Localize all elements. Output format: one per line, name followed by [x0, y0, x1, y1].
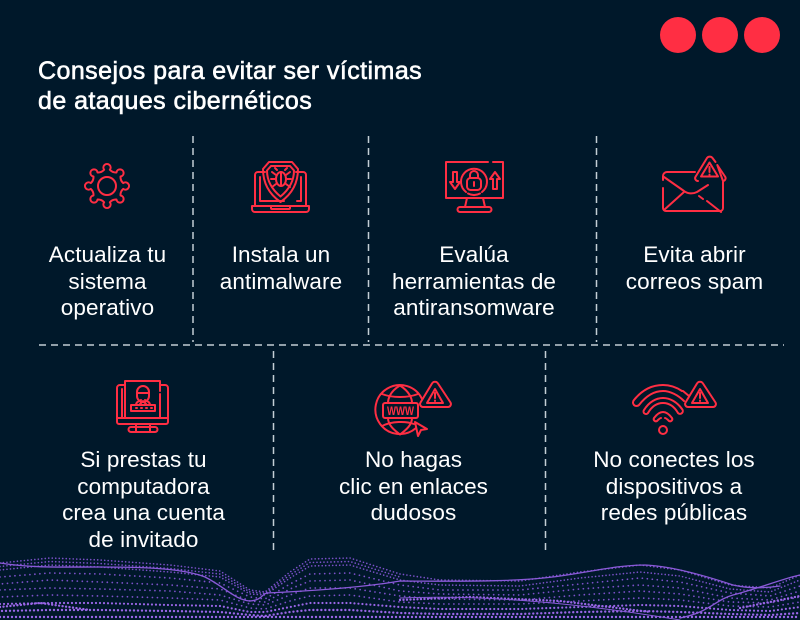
- text: Si prestas tu computadora crea una cuenta de invitado: crea una cuenta: [62, 500, 225, 525]
- text: No hagas clic en enlaces dudosos: [339, 447, 488, 525]
- icon: computer with guest user: [116, 380, 169, 433]
- icon: globe www with warning: WWW: [387, 404, 415, 418]
- text: Evalúa herramientas de antiransomware: [392, 242, 556, 320]
- text: Instala un antimalware: [220, 242, 342, 294]
- text: No hagas clic en enlaces dudosos: dudosos: [371, 500, 456, 525]
- icon: wifi with warning: [632, 380, 717, 435]
- text: Actualiza tu sistema operativo: operativo: [61, 295, 154, 320]
- title: Consejos para evitar ser víctimas: [38, 57, 422, 85]
- title: de ataques cibernéticos: [38, 87, 312, 115]
- icon: laptop with shield and bug: [251, 161, 310, 213]
- text: Evalúa herramientas de antiransomware: Evalúa: [439, 242, 509, 267]
- text: Actualiza tu sistema operativo: [48, 242, 166, 320]
- text: Actualiza tu sistema operativo: sistema: [68, 268, 147, 294]
- text: Si prestas tu computadora crea una cuenta de invitado: computadora: [77, 474, 210, 498]
- text: Instala un antimalware: Instala un: [232, 242, 330, 267]
- text: Evita abrir correos spam: [626, 242, 763, 294]
- text: Evalúa herramientas de antiransomware: herramientas de: [392, 268, 556, 294]
- text: No hagas clic en enlaces dudosos: No hagas: [365, 447, 462, 472]
- decorative red dots: [660, 17, 780, 53]
- text: Evita abrir correos spam: correos spam: [626, 268, 763, 294]
- text: No conectes los dispositivos a redes públicas: No conectes los: [593, 447, 755, 472]
- text: No conectes los dispositivos a redes públicas: [593, 447, 755, 525]
- text: Si prestas tu computadora crea una cuenta de invitado: de invitado: [89, 526, 198, 552]
- text: No hagas clic en enlaces dudosos: clic en enlaces: [339, 474, 488, 498]
- text: Si prestas tu computadora crea una cuenta de invitado: Si prestas tu: [80, 447, 207, 472]
- text: Actualiza tu sistema operativo: Actualiza tu: [49, 242, 166, 267]
- icon: monitor with padlock and arrows: [445, 161, 504, 213]
- icon: envelope with warning: [662, 156, 727, 213]
- text: No conectes los dispositivos a redes públicas: dispositivos a: [606, 474, 742, 498]
- wave highlight lines: [0, 563, 800, 620]
- text: No conectes los dispositivos a redes públicas: redes públicas: [601, 500, 747, 525]
- text: Evalúa herramientas de antiransomware: antiransomware: [393, 295, 555, 320]
- text: Evita abrir correos spam: Evita abrir: [643, 242, 746, 267]
- icon: globe www with warning: [374, 380, 452, 437]
- title: [38, 57, 422, 115]
- text: Instala un antimalware: antimalware: [220, 268, 342, 294]
- icon: gear: [84, 163, 130, 209]
- text: Si prestas tu computadora crea una cuenta de invitado: [62, 447, 225, 552]
- decorative purple dotted wave: [0, 557, 800, 620]
